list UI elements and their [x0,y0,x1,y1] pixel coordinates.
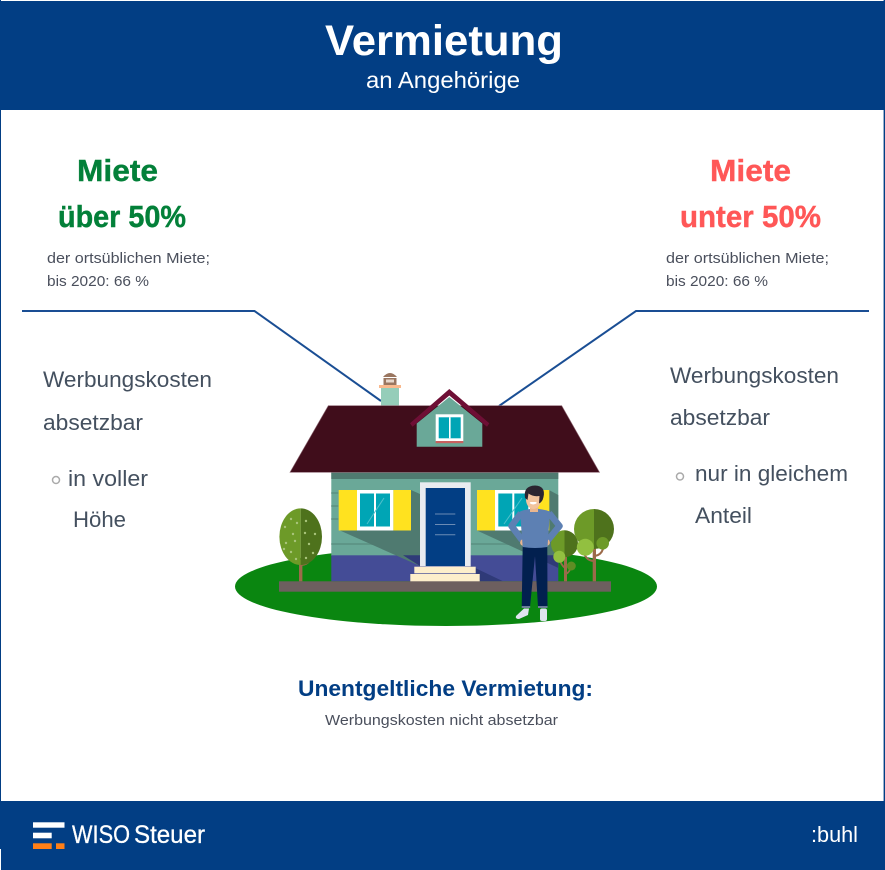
illustration: house scene [235,373,657,626]
title: Vermietung [325,17,563,65]
text: deductible in same share: Werbungskosten [670,363,839,388]
panel: rent below 50 percent [499,153,869,528]
door [420,482,471,566]
connector line left [22,311,381,401]
callout text: Werbungskosten nicht absetzbar [325,712,558,729]
neck and head [530,504,538,512]
note: local rent right: bis 2020: 66 % [666,273,768,290]
heading: Miete unter 50%: unter 50% [680,199,821,234]
dormer [410,389,489,447]
note: local rent [47,250,210,290]
text: deductible in same share: nur in gleichem [695,461,848,486]
header band [0,1,885,110]
chimney [379,373,401,407]
large right tree [574,509,614,581]
text: deductible in full: in voller [68,466,148,491]
left window [339,490,411,530]
logo: WISO Steuer: WISO [72,821,130,849]
legs [522,546,548,607]
text: deductible in full [43,367,212,532]
callout: free rental [298,676,593,729]
note: local rent: der ortsüblichen Miete; [47,250,210,267]
person [512,486,560,621]
right window [477,490,549,530]
heading: Miete unter 50%: Miete [710,153,791,188]
roof [290,406,600,472]
logo: WISO Steuer [33,821,205,849]
heading: Miete über 50% [58,153,186,234]
arms [512,513,522,540]
torso [520,509,550,548]
logo: WISO Steuer: Steuer [134,821,205,849]
house wall [331,472,558,581]
callout heading: Unentgeltliche Vermietung: [298,676,593,701]
text: deductible in same share: Anteil [695,503,752,528]
small right tree [551,530,578,581]
subtitle: an Angehörige [366,67,520,93]
connector line right [499,311,869,406]
heading: Miete über 50%: Miete [77,153,158,188]
note: local rent right: der ortsüblichen Miete; [666,250,829,267]
path [279,581,611,592]
text: deductible in full: absetzbar [43,410,143,435]
footer band [0,801,885,870]
panel: rent above 50 percent [22,153,381,532]
note: local rent right [666,250,829,290]
left tree [279,508,322,581]
text: deductible in same share: absetzbar [670,405,770,430]
heading: Miete unter 50% [680,153,821,234]
shoes [516,608,529,619]
lawn [235,547,657,626]
text: deductible in full: Höhe [73,507,126,532]
note: local rent: bis 2020: 66 % [47,273,149,290]
entrance steps [410,567,480,582]
text: deductible in full: Werbungskosten [43,367,212,392]
logo: buhl: :buhl [811,822,858,847]
heading: Miete über 50%: über 50% [58,199,186,234]
text: deductible in same share [670,363,848,528]
